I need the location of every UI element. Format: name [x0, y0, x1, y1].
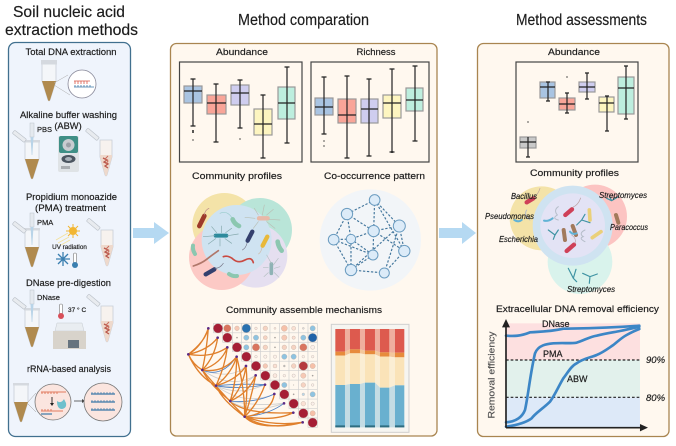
chart: removal efficiency curves: Removal efficiency: [486, 331, 498, 418]
step: alkaline buffer washing: Alkaline buffer washing: [20, 110, 117, 120]
title: soil nucleic acid extraction methods: Soil nucleic acid: [13, 4, 125, 21]
chart: removal efficiency curves: 90%: [646, 355, 666, 366]
title: soil nucleic acid extraction methods: [5, 4, 138, 39]
chart: removal efficiency curves: ABW: [567, 374, 588, 384]
chart: co-occurrence network: [320, 189, 421, 291]
chart: stacked bars: [331, 324, 409, 432]
heading: extracellular DNA removal efficiency: Extracellular DNA removal efficiency: [496, 304, 659, 314]
step: alkaline buffer washing: (ABW): [54, 121, 82, 131]
labels: taxa: Streptomyces: [599, 190, 648, 200]
step: rRNA-based analysis: [13, 364, 122, 422]
heading: richness: Richness: [356, 47, 396, 57]
heading: co-occurrence pattern: Co-occurrence pattern: [324, 171, 425, 181]
heading: community profiles: Community profiles: [530, 168, 619, 178]
chart: correlation matrix with mantel network: [187, 323, 317, 427]
icon: sun: [56, 224, 80, 245]
icon: centrifuge: [58, 136, 79, 172]
labels: taxa: Escherichia: [499, 234, 538, 244]
arrow: to method comparation: [133, 222, 169, 244]
step: propidium monoazide treatment: UV radiation: [52, 244, 87, 251]
chart: removal efficiency curves: PMA: [543, 349, 563, 359]
step: propidium monoazide treatment: [12, 192, 117, 268]
step: DNase pre-digestion: [12, 278, 113, 349]
heading: community profiles: Community profiles: [192, 171, 282, 181]
chart: community profile venn with taxa: [485, 185, 649, 294]
chart: abundance boxplot: [180, 62, 302, 162]
labels: taxa: [485, 190, 649, 294]
step: rRNA-based analysis: rRNA-based analysis: [27, 364, 111, 374]
step: alkaline buffer washing: PBS: [37, 125, 52, 134]
icon: snowflake: [56, 252, 70, 266]
step: total DNA extraction: [26, 47, 116, 101]
title: method assessments: Method assessments: [516, 12, 647, 29]
panel: method assessments: [478, 44, 669, 436]
heading: abundance: Abundance: [548, 47, 600, 57]
panel: extraction methods: [8, 42, 130, 436]
labels: taxa: Streptomyces: [567, 284, 616, 294]
step: total DNA extraction: Total DNA extractionn: [26, 47, 116, 57]
step: propidium monoazide treatment: (PMA) treatment: [35, 203, 106, 213]
step: DNase pre-digestion: DNase: [37, 293, 60, 302]
step: propidium monoazide treatment: Propidium monoazide: [26, 192, 117, 202]
chart: removal efficiency curves: 80%: [646, 393, 666, 404]
title: method comparation: Method comparation: [238, 12, 369, 29]
icon: water bath: [53, 323, 86, 349]
arrow: to method assessments: [439, 222, 476, 244]
step: alkaline buffer washing: [12, 110, 117, 179]
title: soil nucleic acid extraction methods: extraction methods: [5, 22, 138, 39]
labels: taxa: Bacillus: [511, 191, 538, 201]
chart: community profile venn: [189, 193, 292, 290]
chart: removal efficiency curves: DNase: [542, 319, 570, 329]
chart: removal efficiency curves: [486, 319, 666, 431]
chart: abundance boxplot: [516, 62, 638, 162]
step: DNase pre-digestion: DNase pre-digestion: [26, 278, 111, 288]
heading: community assemble mechanisms: Community assemble mechanisms: [226, 305, 382, 315]
icon: thermometer: [72, 253, 78, 268]
step: propidium monoazide treatment: PMA: [37, 218, 53, 227]
labels: taxa: Pseudomonas: [485, 211, 535, 221]
panel: method comparation: [170, 44, 437, 436]
heading: abundance: Abundance: [216, 47, 268, 57]
icon: thermometer: [58, 304, 64, 319]
step: DNase pre-digestion: 37 ° C: [68, 306, 86, 314]
chart: richness boxplot: [311, 62, 429, 162]
labels: taxa: Paracoccus: [610, 222, 649, 232]
